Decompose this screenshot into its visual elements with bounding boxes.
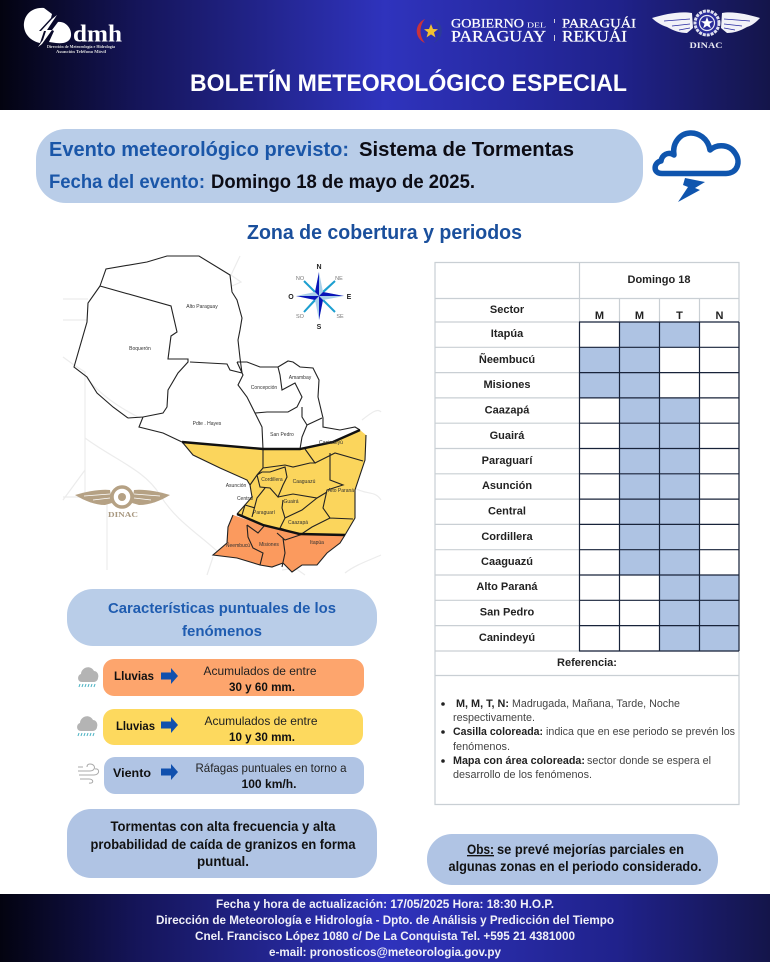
logo: DINAC	[652, 11, 760, 50]
coloured cells	[579, 322, 739, 651]
sector names: Central	[488, 506, 526, 518]
reference list: desarrollo de los fenómenos.	[453, 769, 592, 781]
compass rose: SO	[296, 314, 305, 320]
row: lluvias 30 y 60 mm: Lluvias	[114, 669, 154, 683]
thick zone limits	[182, 430, 360, 449]
footer banner: Fecha y hora de actualización: 17/05/2025 Hora: 18:30 H.O.P.	[216, 897, 554, 911]
reference list: Mapa con área coloreada:	[453, 755, 585, 767]
department labels: Alto Paraná	[328, 488, 354, 494]
department labels: Pdte . Hayes	[193, 421, 222, 427]
reference list	[441, 698, 735, 781]
reference list: Casilla coloreada:	[453, 726, 543, 738]
compass rose: NE	[335, 276, 343, 282]
panel: evento previsto: Sistema de Tormentas	[359, 138, 574, 161]
compass rose: S	[317, 324, 322, 331]
panel: evento previsto: Fecha del evento:	[49, 172, 205, 193]
panel: evento previsto	[36, 129, 643, 203]
department labels: Central	[237, 496, 253, 502]
sector names	[476, 328, 538, 644]
sector names: Itapúa	[491, 328, 524, 340]
row: lluvias 30 y 60 mm: Acumulados de entre	[204, 664, 317, 678]
table: periods by sector: N	[716, 310, 724, 322]
panel: evento previsto: Evento meteorológico previsto:	[49, 138, 349, 161]
icon: rain cloud 2	[77, 716, 97, 736]
sector names: Paraguarí	[482, 455, 533, 467]
department labels: Caazapá	[288, 520, 308, 526]
row: viento: Viento	[113, 766, 151, 780]
compass rose	[288, 264, 352, 331]
footer banner: e-mail: pronosticos@meteorologia.gov.py	[269, 945, 501, 959]
table: periods by sector: M	[595, 310, 604, 322]
panel: evento previsto: Domingo 18 de mayo de 2025.	[211, 172, 475, 193]
panel: características puntuales	[67, 589, 377, 646]
footer banner: Cnel. Francisco López 1080 c/ De La Conquista Tel. +595 21 4381000	[195, 929, 575, 943]
department labels: Amambay	[289, 375, 312, 381]
heading: zona de cobertura: Zona de cobertura y periodos	[247, 222, 522, 244]
table: periods by sector: T	[676, 310, 683, 322]
row: viento: 100 km/h.	[242, 777, 296, 791]
logo: Gobierno del Paraguay: PARAGUÁI	[562, 16, 636, 30]
reference list: sector donde se espera el	[587, 755, 711, 767]
icon: storm cloud	[655, 133, 738, 202]
compass rose: E	[347, 294, 352, 301]
row: lluvias 10 y 30 mm: Lluvias	[116, 719, 155, 733]
logo: dmh: dmh	[73, 22, 122, 48]
department labels: Paraguarí	[253, 510, 276, 516]
row: lluvias 30 y 60 mm	[103, 659, 364, 696]
department borders	[74, 256, 242, 418]
row: lluvias 10 y 30 mm	[103, 709, 363, 745]
watermark DINAC	[75, 487, 170, 519]
reference list: Madrugada, Mañana, Tarde, Noche	[512, 698, 680, 710]
panel: tormentas: Tormentas con alta frecuencia y alta	[110, 819, 336, 834]
row: viento: Ráfagas puntuales en torno a	[196, 761, 347, 775]
panel: observaciones: algunas zonas en el periodo considerado.	[448, 859, 702, 874]
logo: Gobierno del Paraguay	[417, 16, 636, 46]
department labels: Boquerón	[129, 346, 151, 352]
table: periods by sector: Sector	[490, 304, 525, 316]
department labels: Itapúa	[310, 540, 324, 546]
department labels: Asunción	[226, 483, 246, 489]
row: lluvias 10 y 30 mm: Acumulados de entre	[204, 714, 318, 728]
header banner	[0, 0, 770, 110]
logo: dmh	[24, 8, 122, 54]
department labels: Concepción	[251, 385, 277, 391]
sector names: Misiones	[483, 379, 531, 391]
table headers: Domingo 18	[628, 274, 690, 286]
department labels	[129, 304, 354, 549]
sector names: Ñeembucú	[479, 353, 535, 366]
panel: características puntuales: Características puntuales de los	[108, 601, 336, 617]
logo: Gobierno del Paraguay: REKUÁI	[562, 26, 627, 46]
compass rose: O	[288, 294, 294, 301]
sector names: Cordillera	[481, 531, 534, 543]
sector names: Asunción	[482, 480, 532, 492]
logo: dmh: Asunción Teléfono Móvil	[56, 50, 106, 54]
department labels: San Pedro	[270, 432, 294, 438]
department labels: Misiones	[259, 542, 279, 548]
panel: observaciones: Obs:	[467, 842, 494, 857]
icon: rain cloud 1	[78, 667, 98, 687]
reference list: respectivamente.	[453, 712, 535, 724]
panel: observaciones: se prevé mejorías parciales en	[497, 842, 684, 857]
yellow zone	[182, 430, 366, 535]
sector names: Alto Paraná	[476, 581, 538, 593]
compass rose: NO	[296, 276, 305, 282]
sector names: Guairá	[490, 430, 525, 442]
compass rose: N	[316, 264, 322, 271]
sector names: Caaguazú	[481, 556, 533, 568]
department labels: Ñeembucú	[226, 542, 250, 549]
row: lluvias 10 y 30 mm: 10 y 30 mm.	[229, 730, 295, 744]
department labels: Cordillera	[261, 477, 283, 483]
icon: wind	[78, 764, 99, 783]
table: periods by sector: M	[635, 310, 644, 322]
logo: Gobierno del Paraguay: DEL	[527, 22, 546, 30]
sector names: San Pedro	[480, 606, 534, 618]
reference list: indica que en ese periodo se prevén los	[546, 726, 735, 738]
orange zone	[213, 515, 345, 572]
department labels: Canindeyú	[319, 440, 343, 446]
map of Paraguay	[63, 256, 381, 575]
compass rose: SE	[336, 314, 344, 320]
reference list: fenómenos.	[453, 741, 510, 753]
panel: características puntuales: fenómenos	[182, 624, 262, 640]
department labels: Guairá	[283, 499, 299, 505]
sector names: Caazapá	[485, 404, 530, 416]
reference heading: Referencia:	[557, 657, 617, 669]
title: BOLETÍN METEOROLÓGICO ESPECIAL	[190, 69, 627, 97]
logo: Gobierno del Paraguay: GOBIERNO	[451, 16, 524, 30]
gray outer grid	[435, 262, 739, 804]
logo: dmh: Dirección de Meteorología e Hidrología	[47, 45, 115, 49]
watermark DINAC: DINAC	[108, 511, 138, 519]
logo: DINAC: DINAC	[690, 40, 722, 50]
sector names: Canindeyú	[479, 632, 535, 644]
table: periods by sector	[435, 262, 739, 804]
row: viento	[104, 757, 364, 794]
reference list: M, M, T, N:	[456, 698, 509, 710]
panel: tormentas	[67, 809, 377, 878]
footer banner: Dirección de Meteorología e Hidrología - Dpto. de Análisis y Predicción del Tiempo	[156, 913, 614, 927]
black schedule grid	[579, 322, 739, 651]
logo: Gobierno del Paraguay: PARAGUAY	[451, 28, 546, 46]
footer banner	[0, 894, 770, 962]
panel: tormentas: puntual.	[197, 854, 249, 869]
neighbouring borders	[63, 256, 381, 575]
panel: tormentas: probabilidad de caída de granizos en forma	[90, 837, 356, 852]
department labels: Caaguazú	[293, 479, 316, 485]
panel: observaciones	[427, 834, 718, 885]
row: lluvias 30 y 60 mm: 30 y 60 mm.	[229, 680, 295, 694]
department labels: Alto Paraguay	[186, 304, 218, 310]
